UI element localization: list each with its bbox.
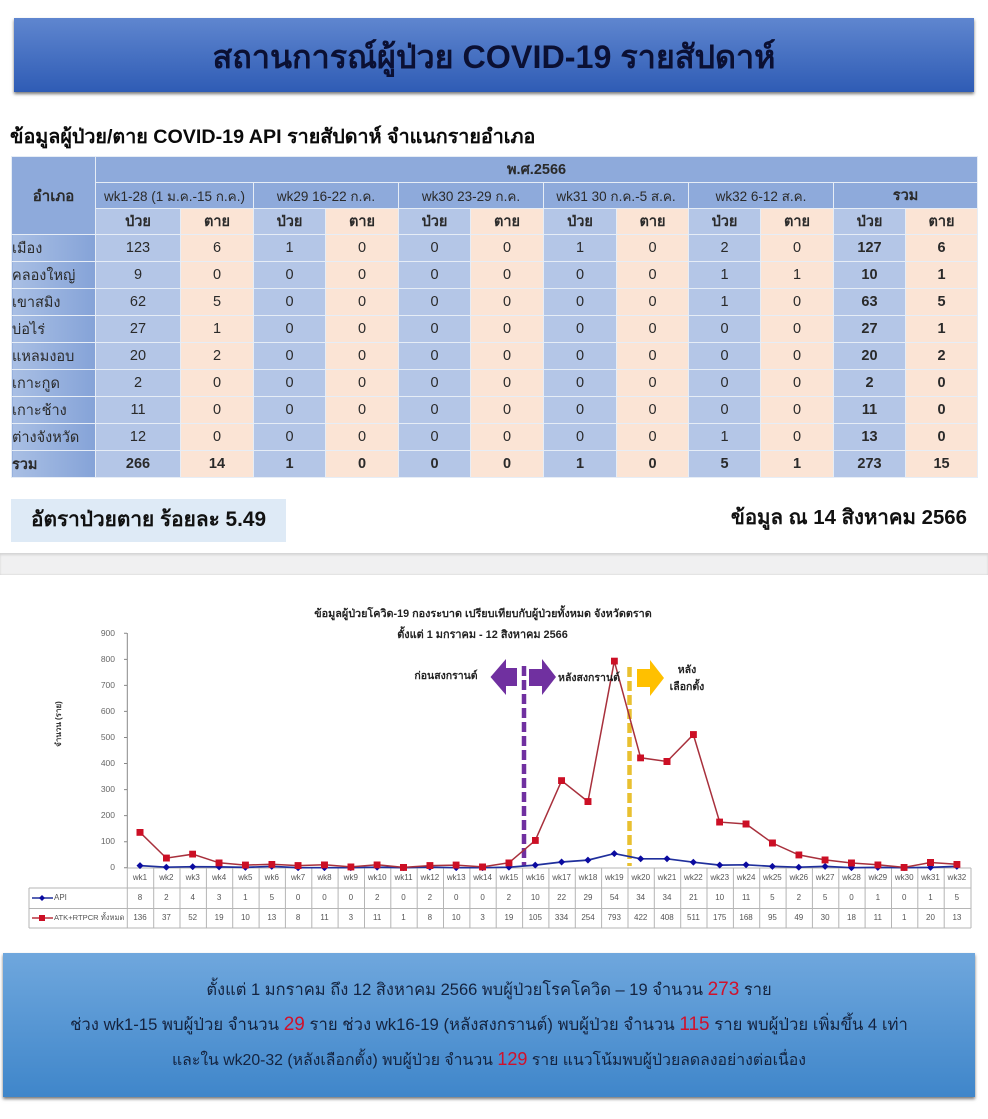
- weekly data table: 1: [576, 456, 584, 472]
- weekly data table: 15: [933, 456, 950, 472]
- weekly data table: 0: [213, 429, 221, 445]
- API row: 8: [138, 893, 143, 902]
- weekly data table: 1: [720, 294, 729, 310]
- weekly data table: 6: [938, 240, 946, 256]
- API row: 0: [401, 893, 406, 902]
- label: after election: [670, 664, 704, 693]
- ATK+RTPCR row: 408: [660, 913, 674, 922]
- ATK+RTPCR row: 1: [902, 913, 907, 922]
- weekly data table: 273: [857, 456, 882, 472]
- weekly data table: 0: [430, 348, 439, 364]
- weekly data table: 0: [576, 294, 584, 310]
- weekly data table: 0: [793, 294, 801, 310]
- weekly data table: 0: [793, 402, 801, 418]
- week labels: wk26: [788, 873, 809, 882]
- weekly data table: 5: [213, 294, 221, 310]
- weekly data table: ป่วย: [277, 214, 302, 230]
- weekly data table: 14: [209, 456, 225, 472]
- weekly data table: ป่วย: [422, 214, 447, 230]
- weekly data table: 0: [213, 267, 221, 283]
- weekly data table: 13: [861, 429, 878, 445]
- weekly data table: 0: [213, 375, 221, 391]
- weekly data table: 0: [358, 429, 366, 445]
- week labels: wk12: [420, 873, 440, 882]
- weekly data table: 0: [938, 402, 946, 418]
- label: after Songkran: หลังสงกรานต์: [558, 671, 620, 684]
- weekly data table: 0: [503, 294, 511, 310]
- weekly data table: คลองใหญ่: [12, 268, 75, 284]
- weekly data table: 1: [793, 267, 801, 283]
- chart title: ข้อมูลผู้ป่วยโควิด-19 กองระบาด เปรียบเทียบกับผู้ป่วยทั้งหมด จังหวัดตราด: [314, 605, 652, 621]
- API row: 2: [428, 893, 433, 902]
- fatality rate box: [11, 499, 286, 542]
- weekly data table: 0: [358, 456, 366, 472]
- weekly data table: เขาสมิง: [12, 294, 60, 310]
- week labels: wk13: [446, 873, 466, 882]
- y axis: 700: [101, 680, 115, 690]
- ATK+RTPCR row: 8: [296, 913, 301, 922]
- weekly data table: 5: [720, 456, 729, 472]
- summary line 3: และใน wk20-32 (หลังเลือกตั้ง) พบผู้ป่วย จำนวน 129 ราย แนวโน้มพบผู้ป่วยลดลงอย่างต่อเนื่อง: [172, 1049, 806, 1069]
- weekly data table: 0: [503, 348, 511, 364]
- week labels: wk10: [367, 873, 387, 882]
- ATK+RTPCR row: 19: [504, 913, 514, 922]
- weekly data table: 0: [285, 294, 294, 310]
- y axis: [101, 628, 127, 872]
- week labels: wk6: [264, 873, 279, 882]
- API row: 0: [849, 893, 854, 902]
- weekly data table: 10: [861, 267, 878, 283]
- API row: 2: [507, 893, 512, 902]
- ATK+RTPCR row: 422: [634, 913, 648, 922]
- API row: 0: [349, 893, 354, 902]
- weekly data table: รวม: [893, 188, 918, 204]
- API row: 34: [663, 893, 672, 902]
- title banner: สถานการณ์ผู้ป่วย COVID-19 รายสัปดาห์: [213, 39, 775, 75]
- week labels: wk17: [551, 873, 571, 882]
- ATK+RTPCR row: 793: [608, 913, 622, 922]
- weekly data table: ป่วย: [125, 214, 151, 230]
- week labels: [132, 873, 967, 882]
- weekly data table: 1: [213, 321, 221, 337]
- weekly data table: 63: [861, 294, 878, 310]
- ATK+RTPCR row: 52: [188, 913, 198, 922]
- weekly data table: 2: [213, 348, 221, 364]
- y axis title: จำนวน (ราย): [54, 701, 63, 747]
- y axis: 0: [110, 862, 115, 872]
- weekly data table: ตาย: [784, 214, 810, 230]
- API row: 5: [770, 893, 775, 902]
- week labels: wk30: [894, 873, 914, 882]
- API row: 11: [742, 893, 751, 902]
- weekly data table: ป่วย: [567, 214, 593, 230]
- week labels: wk31: [920, 873, 940, 882]
- weekly data table: 0: [648, 294, 657, 310]
- week labels: wk24: [736, 873, 756, 882]
- y axis: 900: [101, 628, 115, 638]
- week labels: wk19: [604, 873, 624, 882]
- API row: 1: [876, 893, 881, 902]
- week labels: wk1: [132, 873, 148, 882]
- weekly data table: ตาย: [349, 214, 375, 230]
- API row: 0: [454, 893, 459, 902]
- weekly data table: 0: [430, 294, 439, 310]
- ATK+RTPCR row: 1: [401, 913, 406, 922]
- ATK+RTPCR row: 511: [687, 913, 700, 922]
- API row: 1: [243, 893, 248, 902]
- week labels: wk29: [867, 873, 888, 882]
- fatality rate box: อัตราป่วยตาย ร้อยละ 5.49: [31, 508, 266, 531]
- weekly data table: wk32 6-12 ส.ค.: [716, 188, 806, 204]
- API row: 54: [610, 893, 619, 902]
- week labels: wk14: [472, 873, 492, 882]
- weekly data table: เกาะช้าง: [12, 402, 67, 418]
- weekly data table: 20: [861, 348, 878, 364]
- week labels: wk27: [815, 873, 835, 882]
- ATK+RTPCR row: 11: [373, 913, 382, 922]
- ATK+RTPCR row: 13: [952, 913, 962, 922]
- weekly data table: 0: [358, 348, 366, 364]
- weekly data table: 0: [648, 375, 657, 391]
- weekly data table: ตาย: [928, 214, 955, 230]
- week labels: wk9: [343, 873, 358, 882]
- weekly data table: 0: [720, 402, 729, 418]
- weekly data table: 1: [720, 429, 729, 445]
- API row: 4: [190, 893, 195, 902]
- week labels: wk16: [525, 873, 545, 882]
- API row: 21: [689, 893, 698, 902]
- weekly data table: 0: [720, 348, 729, 364]
- API row: 5: [270, 893, 275, 902]
- weekly data table: [11, 156, 978, 478]
- y axis: 100: [101, 836, 115, 846]
- weekly data table: 0: [793, 375, 801, 391]
- y axis: 400: [101, 758, 115, 768]
- weekly data table: 0: [503, 321, 511, 337]
- label: before Songkran: ก่อนสงกรานต์: [414, 669, 478, 682]
- weekly data table: 0: [793, 429, 801, 445]
- ATK+RTPCR row: 95: [768, 913, 777, 922]
- weekly data table: 27: [861, 321, 878, 337]
- chart title: [314, 605, 652, 641]
- ATK+RTPCR row: 20: [926, 913, 935, 922]
- weekly data table: บ่อไร่: [12, 322, 45, 338]
- week labels: wk21: [657, 873, 677, 882]
- weekly data table: 0: [938, 429, 946, 445]
- ATK+RTPCR row: 3: [480, 913, 485, 922]
- API row: 2: [164, 893, 169, 902]
- API row: 3: [217, 893, 222, 902]
- weekly data table: ตาย: [639, 214, 666, 230]
- API line: [140, 854, 957, 868]
- arrow: before Songkran: [490, 659, 517, 695]
- week labels: wk3: [185, 873, 200, 882]
- weekly data table: 0: [430, 402, 439, 418]
- weekly data table: 0: [503, 375, 511, 391]
- weekly data table: 0: [576, 429, 584, 445]
- weekly data table: 266: [126, 456, 150, 472]
- summary line 1: ตั้งแต่ 1 มกราคม ถึง 12 สิงหาคม 2566 พบผู้ป่วยโรคโควิด – 19 จำนวน 273 ราย: [206, 979, 772, 1000]
- weekly data table: เกาะกูด: [12, 376, 60, 392]
- weekly data table: 27: [130, 321, 146, 337]
- weekly data table: 0: [648, 456, 657, 472]
- weekly data table: wk31 30 ก.ค.-5 ส.ค.: [556, 188, 676, 204]
- week labels: wk25: [762, 873, 782, 882]
- weekly data table: พ.ศ.2566: [507, 162, 566, 178]
- weekly data table: 0: [720, 321, 729, 337]
- weekly data table: 1: [720, 267, 729, 283]
- weekly data table: 0: [503, 267, 511, 283]
- weekly data table: 0: [576, 267, 584, 283]
- week labels: wk23: [709, 873, 730, 882]
- weekly data table: 0: [648, 429, 657, 445]
- weekly data table: 0: [358, 402, 366, 418]
- ATK+RTPCR row: 37: [162, 913, 171, 922]
- week labels: wk32: [947, 873, 967, 882]
- weekly data table: 0: [503, 429, 511, 445]
- API row: 1: [928, 893, 933, 902]
- ATK+RTPCR row: 30: [821, 913, 830, 922]
- legend: API: [32, 893, 67, 902]
- API row: 0: [480, 893, 485, 902]
- weekly data table: 0: [503, 402, 511, 418]
- weekly data table: 0: [358, 294, 366, 310]
- weekly data table: 123: [126, 240, 150, 256]
- API row: 29: [584, 893, 593, 902]
- weekly data table: เมือง: [12, 240, 42, 256]
- API row: 34: [636, 893, 646, 902]
- weekly data table: wk1-28 (1 ม.ค.-15 ก.ค.): [104, 188, 245, 204]
- weekly data table: 1: [285, 240, 294, 256]
- chart title: ตั้งแต่ 1 มกราคม - 12 สิงหาคม 2566: [397, 626, 568, 641]
- weekly data table: ต่างจังหวัด: [12, 430, 79, 446]
- weekly data table: 2: [865, 375, 874, 391]
- weekly data table: 0: [358, 375, 366, 391]
- y axis: 800: [101, 654, 115, 664]
- ATK+RTPCR row: 136: [133, 913, 147, 922]
- week labels: wk11: [393, 873, 413, 882]
- weekly data table: 0: [430, 456, 439, 472]
- line chart: API vs ATK+RTPCR patients: [28, 605, 972, 928]
- weekly data table: 2: [134, 375, 142, 391]
- legend: API: API: [54, 893, 67, 902]
- API row: 0: [902, 893, 907, 902]
- API row: 5: [823, 893, 828, 902]
- ATK+RTPCR line: [140, 661, 957, 867]
- weekly data table: 0: [648, 402, 657, 418]
- weekly data table: 0: [503, 456, 511, 472]
- API row: 5: [955, 893, 960, 902]
- weekly data table: wk30 23-29 ก.ค.: [422, 188, 520, 204]
- ATK+RTPCR row: 334: [555, 913, 569, 922]
- week labels: wk18: [578, 873, 598, 882]
- weekly data table: 0: [503, 240, 511, 256]
- week labels: wk22: [683, 873, 703, 882]
- weekly data table: ตาย: [494, 214, 520, 230]
- ATK+RTPCR row: 10: [241, 913, 250, 922]
- weekly data table: 0: [720, 375, 729, 391]
- week labels: wk7: [290, 873, 306, 882]
- weekly data table: ตาย: [204, 214, 230, 230]
- week labels: wk8: [316, 873, 332, 882]
- data date note: ข้อมูล ณ 14 สิงหาคม 2566: [731, 507, 967, 529]
- weekly data table: 0: [648, 267, 657, 283]
- legend: ATK+RTPCR: ATK+RTPCR ทั้งหมด: [54, 912, 124, 922]
- weekly data table: 5: [938, 294, 946, 310]
- week labels: wk4: [211, 873, 227, 882]
- arrow: after Songkran: [529, 659, 556, 695]
- weekly data table: 0: [285, 375, 294, 391]
- election marker line: [627, 667, 632, 866]
- ATK+RTPCR row: 10: [452, 913, 461, 922]
- API row: 10: [715, 893, 725, 902]
- weekly data table: 12: [130, 429, 146, 445]
- weekly data table: 0: [430, 429, 439, 445]
- weekly data table: 0: [358, 321, 366, 337]
- ATK+RTPCR row: 168: [739, 913, 753, 922]
- arrow: after election: [637, 660, 664, 696]
- weekly data table: 0: [285, 429, 294, 445]
- weekly data table: แหลมงอบ: [12, 348, 74, 364]
- weekly data table: อำเภอ: [33, 188, 74, 204]
- weekly data table: 0: [430, 375, 439, 391]
- summary box: [3, 953, 975, 1097]
- weekly data table: 0: [648, 348, 657, 364]
- data table grid: [29, 868, 971, 928]
- weekly data table: 6: [213, 240, 221, 256]
- API row: 2: [375, 893, 380, 902]
- weekly data table: 0: [285, 267, 294, 283]
- API row: 10: [531, 893, 540, 902]
- y axis: 300: [101, 784, 115, 794]
- weekly data table: ป่วย: [857, 214, 882, 230]
- weekly data table: 0: [793, 348, 801, 364]
- weekly data table: 0: [358, 240, 366, 256]
- weekly data table: 20: [130, 348, 146, 364]
- API row: 2: [797, 893, 802, 902]
- y axis: 500: [101, 732, 115, 742]
- weekly data table: 1: [938, 321, 946, 337]
- weekly data table: 1: [576, 240, 584, 256]
- weekly data table: 127: [857, 240, 882, 256]
- weekly data table: 62: [130, 294, 146, 310]
- API row: 0: [322, 893, 327, 902]
- ATK+RTPCR row: 11: [320, 913, 329, 922]
- weekly data table: 0: [285, 402, 294, 418]
- y axis: 600: [101, 706, 115, 716]
- weekly data table: 1: [793, 456, 801, 472]
- ATK+RTPCR row: 105: [529, 913, 543, 922]
- weekly data table: 2: [938, 348, 946, 364]
- weekly data table: 0: [358, 267, 366, 283]
- week labels: wk15: [499, 873, 519, 882]
- weekly data table: 0: [648, 321, 657, 337]
- API row: 22: [557, 893, 567, 902]
- weekly data table: รวม: [12, 456, 38, 472]
- label: after election: เลือกตั้ง: [670, 678, 704, 693]
- weekly data table: ป่วย: [712, 214, 737, 230]
- ATK+RTPCR row: 175: [713, 913, 727, 922]
- weekly data table: 11: [130, 402, 146, 418]
- ATK+RTPCR row: 49: [794, 913, 804, 922]
- weekly data table: 0: [430, 321, 439, 337]
- ATK+RTPCR row: 8: [428, 913, 433, 922]
- ATK+RTPCR row: 11: [874, 913, 882, 922]
- weekly data table: 0: [793, 240, 801, 256]
- week labels: wk28: [841, 873, 861, 882]
- weekly data table: 1: [938, 267, 946, 283]
- ATK+RTPCR row: [133, 913, 962, 922]
- week labels: wk2: [158, 873, 174, 882]
- ATK+RTPCR row: 13: [267, 913, 277, 922]
- weekly data table: 0: [285, 348, 294, 364]
- weekly data table: 11: [862, 402, 877, 418]
- summary line 2: ช่วง wk1-15 พบผู้ป่วย จำนวน 29 ราย ช่วง wk16-19 (หลังสงกรานต์) พบผู้ป่วย จำนวน 115 ราย พบผู้ป่วย เพิ่มขึ้น 4 เท่า: [70, 1014, 908, 1034]
- API row: 0: [296, 893, 301, 902]
- weekly data table: 0: [285, 321, 294, 337]
- weekly data table: 0: [576, 348, 584, 364]
- table heading: ข้อมูลผู้ป่วย/ตาย COVID-19 API รายสัปดาห์ จำแนกรายอำเภอ: [10, 126, 535, 148]
- week labels: wk5: [237, 873, 253, 882]
- weekly data table: 0: [430, 240, 439, 256]
- ATK+RTPCR row: 3: [349, 913, 354, 922]
- weekly data table: 2: [720, 240, 729, 256]
- weekly data table: 0: [576, 402, 584, 418]
- ATK+RTPCR row: 19: [215, 913, 224, 922]
- weekly data table: 0: [648, 240, 657, 256]
- Songkran marker line: [522, 666, 526, 866]
- weekly data table: wk29 16-22 ก.ค.: [277, 188, 375, 204]
- weekly data table: 0: [213, 402, 221, 418]
- weekly data table: 9: [134, 267, 142, 283]
- weekly data table: 0: [793, 321, 801, 337]
- legend: ATK+RTPCR: [32, 912, 124, 922]
- ATK+RTPCR row: 18: [847, 913, 856, 922]
- title banner: [14, 18, 974, 92]
- API row: [138, 893, 960, 902]
- y axis: 200: [101, 810, 115, 820]
- weekly data table: 0: [576, 321, 584, 337]
- weekly data table: 0: [938, 375, 946, 391]
- weekly data table: 0: [430, 267, 439, 283]
- weekly data table: 1: [285, 456, 294, 472]
- label: after election: หลัง: [678, 664, 696, 676]
- week labels: wk20: [630, 873, 651, 882]
- ATK+RTPCR row: 254: [581, 913, 595, 922]
- weekly data table: 0: [576, 375, 584, 391]
